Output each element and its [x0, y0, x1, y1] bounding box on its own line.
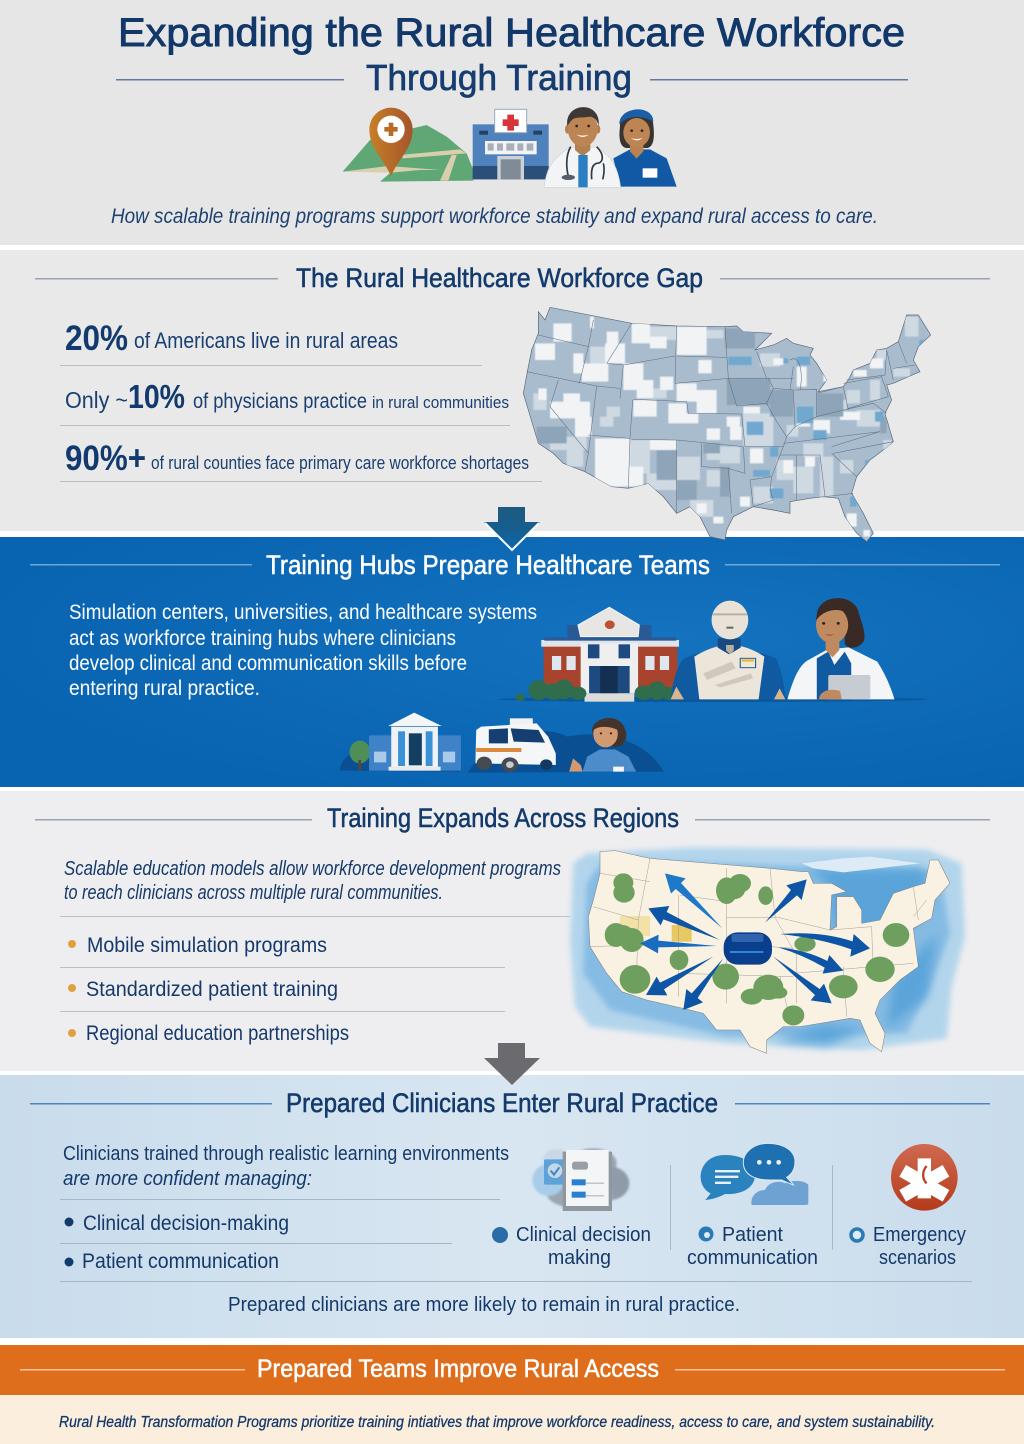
stat: 10 percent: in rural communities [372, 393, 509, 412]
list: training models: Mobile simulation programs [87, 934, 327, 957]
panel: training hubs [0, 537, 1024, 787]
stat: 90 percent: 90%+ [65, 439, 146, 478]
label: clinical decision making [492, 1223, 651, 1269]
icon: university building [515, 607, 679, 702]
label: patient communication [687, 1223, 818, 1269]
white county blocks [535, 317, 883, 537]
tagline: How scalable training programs support workforce stability and expand rural access to care. [111, 205, 878, 228]
stat: 20 percent [65, 319, 398, 358]
stat: 20 percent: 20% [65, 319, 128, 358]
text block: scalable models [64, 858, 561, 904]
arrow: gap to hubs [484, 507, 540, 550]
panel: footer note [0, 1395, 1024, 1444]
list: training models [60, 934, 505, 1045]
list: managed skills: Clinical decision-making [83, 1212, 289, 1235]
map: county shortage choropleth [523, 307, 931, 542]
accent county blocks [728, 340, 924, 507]
list: managed skills: Patient communication [82, 1250, 279, 1273]
map land [588, 851, 950, 1053]
label: patient communication: Patient [722, 1223, 783, 1246]
icon: speech bubbles [701, 1143, 808, 1205]
label: patient communication: communication [687, 1246, 818, 1269]
icon: clinical decision clipboard [532, 1148, 629, 1211]
list: training models: Regional education partnerships [86, 1022, 349, 1045]
icon: green hills [343, 125, 473, 182]
subtitle: Through Training [366, 57, 632, 98]
stat: 10 percent [65, 378, 509, 415]
label: clinical decision making: making [548, 1246, 611, 1269]
text block: confident managing [63, 1143, 509, 1190]
hub marker [724, 932, 772, 965]
text block: hubs description: Simulation centers, universities, and healthcare systems [69, 601, 537, 624]
heading: workforce gap: The Rural Healthcare Workforce Gap [296, 263, 703, 293]
stat: 20 percent: of Americans live in rural areas [134, 328, 398, 353]
map: regional expansion [570, 847, 965, 1053]
watercolor background [570, 847, 965, 1050]
text block: hubs description [69, 601, 537, 700]
light county blocks [533, 317, 918, 517]
state borders [527, 320, 915, 513]
title: Expanding the Rural Healthcare Workforce [118, 11, 905, 55]
text block: scalable models: Scalable education models allow workforce development programs [64, 858, 561, 880]
text block: confident managing: are more confident managing: [63, 1168, 312, 1190]
label: clinical decision making: Clinical decision [516, 1223, 651, 1246]
green regions [605, 873, 909, 1025]
heading: prepared clinicians: Prepared Clinicians Enter Rural Practice [286, 1088, 718, 1118]
panel: training expands [0, 791, 1024, 1071]
text block: hubs description: develop clinical and communication skills before [69, 652, 467, 675]
labels: skill icons [492, 1223, 967, 1269]
text block: confident managing: Clinicians trained through realistic learning environments [63, 1143, 509, 1165]
icon: map pin [369, 108, 413, 176]
list: managed skills [60, 1212, 452, 1273]
stat: 10 percent: Only ~ [65, 387, 128, 413]
text block: scalable models: to reach clinicians across multiple rural communities. [64, 882, 443, 904]
panel: workforce gap [0, 250, 1024, 531]
list: training models: Standardized patient training [86, 978, 338, 1001]
icon: doctor [544, 107, 621, 187]
stat: 90 percent: of rural counties face primary care workforce shortages [151, 453, 529, 473]
stat: 90 percent [65, 439, 529, 478]
state borders [590, 858, 927, 1020]
stat: 10 percent: 10% [128, 378, 185, 415]
text block: hubs description: entering rural practice. [69, 677, 260, 700]
panel: prepared clinicians [0, 1075, 1024, 1338]
icon: simulation mannequin [671, 601, 785, 699]
label: emergency scenarios: scenarios [879, 1246, 956, 1269]
icon: nurse [613, 109, 677, 187]
label: emergency scenarios: Emergency [873, 1223, 967, 1246]
callout: retention: Prepared clinicians are more likely to remain in rural practice. [228, 1294, 740, 1316]
dark county blocks [537, 328, 887, 500]
icon: clinician with tablet [787, 598, 894, 699]
label: emergency scenarios [851, 1223, 967, 1269]
icon: rural map, hospital and clinicians [343, 107, 677, 187]
icon: small regional row [340, 713, 664, 773]
arrows radiating from hub [640, 873, 870, 1010]
icon: training hub illustrations [340, 598, 927, 773]
heading: training hubs: Training Hubs Prepare Healthcare Teams [266, 550, 710, 580]
heading: training expands: Training Expands Across Regions [327, 803, 679, 833]
heading: prepared teams: Prepared Teams Improve Rural Access [257, 1355, 659, 1383]
arrow: regions to clinicians [484, 1043, 540, 1085]
icon: emergency star of life [891, 1144, 958, 1211]
panel: footer banner [0, 1345, 1024, 1395]
text block: hubs description: act as workforce training hubs where clinicians [69, 627, 456, 650]
stat: 10 percent: of physicians practice [193, 390, 367, 413]
panel: header [0, 0, 1024, 245]
icon: hospital [473, 109, 549, 180]
